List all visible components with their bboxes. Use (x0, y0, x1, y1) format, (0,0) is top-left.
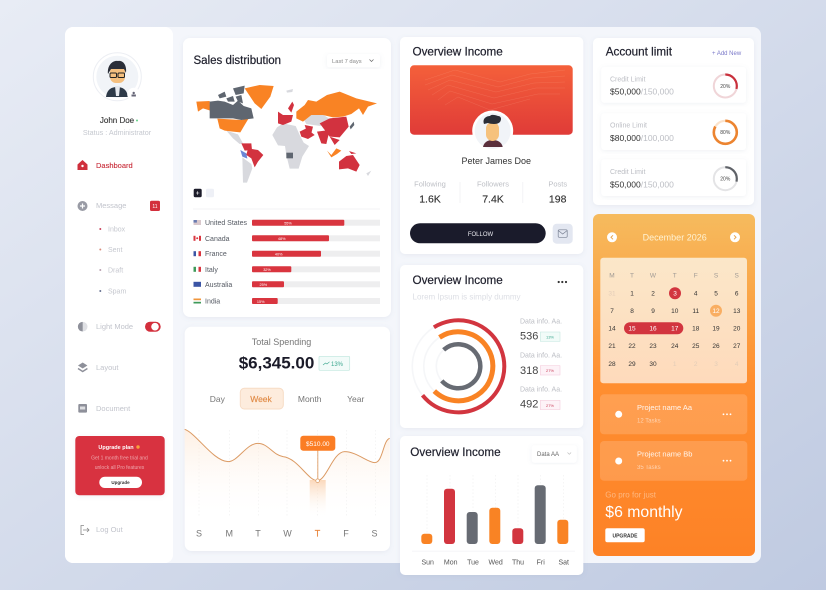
nav: dashboard: Dashboard (96, 161, 133, 170)
data row 3: 492 (520, 398, 538, 410)
calendar grid: S (735, 272, 740, 280)
stats row (414, 180, 567, 206)
calendar grid: 20 (733, 326, 741, 332)
row: italy (194, 266, 380, 274)
project card b: Project name Bb (637, 450, 692, 459)
dropdown: data aa (532, 445, 577, 463)
calendar header (607, 232, 740, 242)
panel: sales distribution (183, 38, 391, 317)
data row 3 (520, 386, 562, 410)
nav: message: Message (96, 201, 126, 210)
icon: more menu (558, 281, 567, 283)
calendar grid: 10 (671, 308, 679, 315)
data rows (520, 319, 562, 410)
calendar grid: M (609, 272, 615, 280)
project card a (600, 394, 747, 434)
calendar grid: 12 (712, 308, 720, 315)
calendar grid: 3 (714, 361, 718, 368)
calendar grid: 1 (630, 290, 634, 298)
axis: weekdays (196, 528, 378, 538)
tabs: period (210, 388, 364, 409)
calendar grid: 7 (610, 308, 614, 315)
row: canada (194, 235, 380, 243)
data row 2 (520, 352, 562, 377)
nav: layout (78, 362, 119, 372)
calendar grid: 2 (694, 361, 698, 368)
calendar grid: 11 (692, 308, 699, 315)
stats row: Followers (477, 180, 509, 189)
calendar grid: 29 (628, 361, 636, 368)
stats row: 198 (549, 194, 567, 206)
dropdown: last 7 days (327, 54, 380, 67)
row: united states: 55% (284, 222, 292, 226)
panel: bar chart overview (400, 436, 583, 575)
nav: document: Document (96, 404, 131, 413)
data row 1: 13% (546, 334, 554, 340)
button: mail (553, 224, 573, 244)
project card b (600, 441, 747, 481)
heading: account limit: Account limit (606, 46, 673, 58)
limit card 3: 20% (720, 176, 731, 182)
calendar grid: 14 (608, 326, 616, 332)
calendar grid: T (630, 272, 634, 280)
icon: user avatar (93, 53, 141, 101)
limit card 1: 20% (720, 84, 731, 90)
heading: sales distribution: Sales distribution (194, 55, 281, 67)
row: australia (194, 281, 380, 289)
link: add new: + Add New (712, 51, 742, 57)
panel: radial overview (395, 265, 583, 430)
tooltip: 510 dollars: $510.00 (306, 441, 330, 448)
user name: John Doe (100, 116, 135, 125)
calendar grid: 15 (628, 326, 636, 332)
axis: days: Fri (537, 560, 545, 566)
row: india: 15% (257, 300, 265, 304)
calendar grid: 26 (712, 343, 720, 350)
panel: account limit (593, 38, 754, 205)
panel: calendar and upgrade (593, 214, 755, 556)
row: france (194, 251, 380, 258)
row: france: 40% (275, 252, 283, 256)
calendar grid: 2 (651, 290, 655, 298)
axis: days: Thu (512, 560, 524, 566)
limit card 2: $80,000/100,000 (610, 133, 674, 143)
amount: $6,345.00 (239, 354, 314, 372)
calendar grid: 28 (608, 361, 616, 368)
button: upgrade (605, 528, 645, 542)
axis: days: Mon (444, 560, 458, 566)
nav: message sub-items (99, 226, 126, 296)
main dashboard panel (65, 27, 761, 563)
card: upgrade plan: Upgrade (111, 480, 130, 485)
tabs: period: Month (298, 394, 322, 404)
card: upgrade plan (75, 436, 165, 495)
limit card 2: Online Limit (610, 123, 647, 130)
axis: weekdays: F (343, 528, 349, 538)
nav: light mode (78, 322, 161, 332)
button: follow: FOLLOW (468, 232, 494, 238)
limit card 3 (601, 159, 746, 196)
nav: light mode: Light Mode (96, 322, 133, 331)
calendar grid: T (673, 272, 677, 280)
nav: dashboard (78, 160, 133, 170)
banner with contours (410, 65, 573, 135)
heading: overview income: Overview Income (412, 274, 503, 287)
limit card 2: 80% (720, 130, 731, 136)
badge: 13 percent: 13% (331, 362, 344, 368)
calendar grid: 4 (735, 361, 739, 368)
card: upgrade plan: unlock all Pro features (95, 465, 145, 471)
tabs: period: Year (347, 394, 364, 404)
calendar header: December 2026 (643, 232, 707, 242)
row: australia: 25% (259, 283, 268, 287)
heading: overview income: Overview Income (412, 46, 503, 58)
data row 2: 27% (546, 368, 554, 373)
calendar grid: 5 (714, 290, 718, 298)
row: united states: United States (205, 220, 248, 227)
calendar grid: 9 (651, 308, 655, 315)
radial chart (395, 303, 522, 430)
axis: days: Tue (467, 560, 479, 566)
row: india (194, 298, 380, 306)
calendar grid: 8 (630, 308, 634, 315)
axis: weekdays: T (255, 528, 261, 538)
calendar grid: 13 (733, 308, 741, 315)
stats row: 1.6K (419, 194, 441, 206)
nav: message: 11 (152, 204, 158, 210)
nav: document (78, 404, 131, 413)
calendar grid: 30 (649, 361, 657, 368)
bar list: countries (194, 220, 380, 306)
data row 3: 27% (546, 403, 554, 408)
calendar grid: 18 (692, 326, 700, 332)
row: canada: 48% (278, 237, 286, 241)
row: italy: 32% (263, 268, 271, 272)
stats row: Posts (548, 180, 567, 189)
row: france: France (205, 251, 227, 258)
calendar grid: 17 (671, 326, 679, 332)
row: india: India (205, 298, 220, 306)
data row 2: Data info. Aa. (520, 352, 562, 359)
dropdown: last 7 days: Last 7 days (332, 59, 362, 65)
calendar grid: 4 (694, 290, 698, 298)
tabs: period: Week (250, 394, 273, 404)
subtitle: Lorem Ipsum is simply dummy (412, 292, 521, 302)
limit card 2 (601, 113, 746, 150)
tabs: period: Day (210, 394, 226, 404)
project card a: Project name Aa (637, 403, 693, 412)
stats row: 7.4K (482, 194, 504, 206)
tooltip: 510 dollars (300, 436, 335, 451)
axis: days (421, 560, 569, 566)
row: canada: Canada (205, 236, 230, 243)
calendar grid: 19 (712, 326, 720, 332)
status dot (136, 120, 138, 122)
nav: message sub-items: Draft (108, 268, 123, 274)
calendar grid: 6 (735, 290, 739, 298)
card: upgrade plan: Upgrade plan (98, 445, 134, 451)
axis: days: Sun (421, 560, 434, 566)
nav: message sub-items: Inbox (108, 226, 126, 234)
user name: Peter James Doe (462, 156, 531, 166)
axis: weekdays: M (226, 528, 233, 538)
nav: layout: Layout (96, 363, 119, 372)
calendar grid: 16 (649, 326, 657, 332)
nav: message sub-items: Spam (108, 288, 126, 296)
calendar grid: W (650, 272, 657, 280)
pro offer text: Go pro for just (605, 491, 657, 500)
axis: days: Sat (558, 560, 569, 566)
data row 1 (520, 319, 562, 343)
nav: log out: Log Out (96, 525, 124, 534)
badge: 13 percent (319, 356, 350, 370)
row: italy: Italy (205, 267, 218, 274)
heading: total spending: Total Spending (252, 337, 311, 347)
nav: message (78, 201, 160, 211)
calendar grid: F (694, 272, 698, 280)
axis: weekdays: S (371, 528, 378, 538)
stats row: Following (414, 180, 446, 189)
calendar grid: 25 (692, 343, 700, 350)
calendar grid: S (714, 272, 719, 280)
calendar grid: 23 (649, 343, 657, 350)
data row 2: 318 (520, 365, 538, 377)
line chart: weekly spending (185, 429, 390, 518)
button: follow (410, 223, 546, 243)
project card a: 12 Tasks (637, 418, 661, 424)
icon: peter avatar (472, 110, 513, 152)
nav: message sub-items: Sent (108, 247, 122, 254)
calendar grid: 1 (673, 361, 677, 368)
map zoom controls (194, 189, 214, 197)
panel: total spending (185, 327, 390, 551)
calendar grid: 3 (673, 290, 677, 298)
calendar grid: 22 (628, 343, 636, 350)
user status: Status : Administrator (83, 128, 152, 137)
limit card 3: $50,000/150,000 (610, 179, 674, 189)
dropdown: data aa: Data AA (537, 452, 559, 458)
axis: days: Wed (489, 560, 503, 566)
heading: overview income: Overview Income (410, 446, 501, 459)
limit card 1: $50,000/150,000 (610, 87, 674, 97)
bar chart (421, 485, 568, 544)
row: united states (194, 220, 380, 227)
data row 1: Data info. Aa. (520, 319, 562, 326)
data row 3: Data info. Aa. (520, 386, 562, 394)
axis: weekdays: W (283, 528, 292, 538)
axis: weekdays: S (196, 528, 202, 538)
axis: weekdays: T (315, 528, 321, 538)
pro price: $6 monthly (605, 504, 683, 521)
limit card 1 (601, 67, 746, 103)
calendar grid: 27 (733, 343, 741, 350)
world map (196, 85, 377, 183)
calendar grid: 31 (608, 290, 616, 298)
button: upgrade: UPGRADE (612, 534, 638, 540)
limit card 1: Credit Limit (610, 76, 645, 83)
calendar grid: 21 (608, 343, 616, 350)
calendar grid: 24 (671, 343, 679, 350)
limit card 3: Credit Limit (610, 169, 645, 176)
project card b: 35 Tasks (637, 465, 661, 471)
calendar grid (600, 258, 747, 383)
card: upgrade plan: Get 1 month free trial and (91, 456, 148, 462)
panel: profile overview (400, 37, 583, 254)
nav: log out (81, 525, 124, 534)
panel: sidebar (65, 27, 173, 563)
row: australia: Australia (205, 282, 232, 289)
data row 1: 536 (520, 331, 538, 343)
